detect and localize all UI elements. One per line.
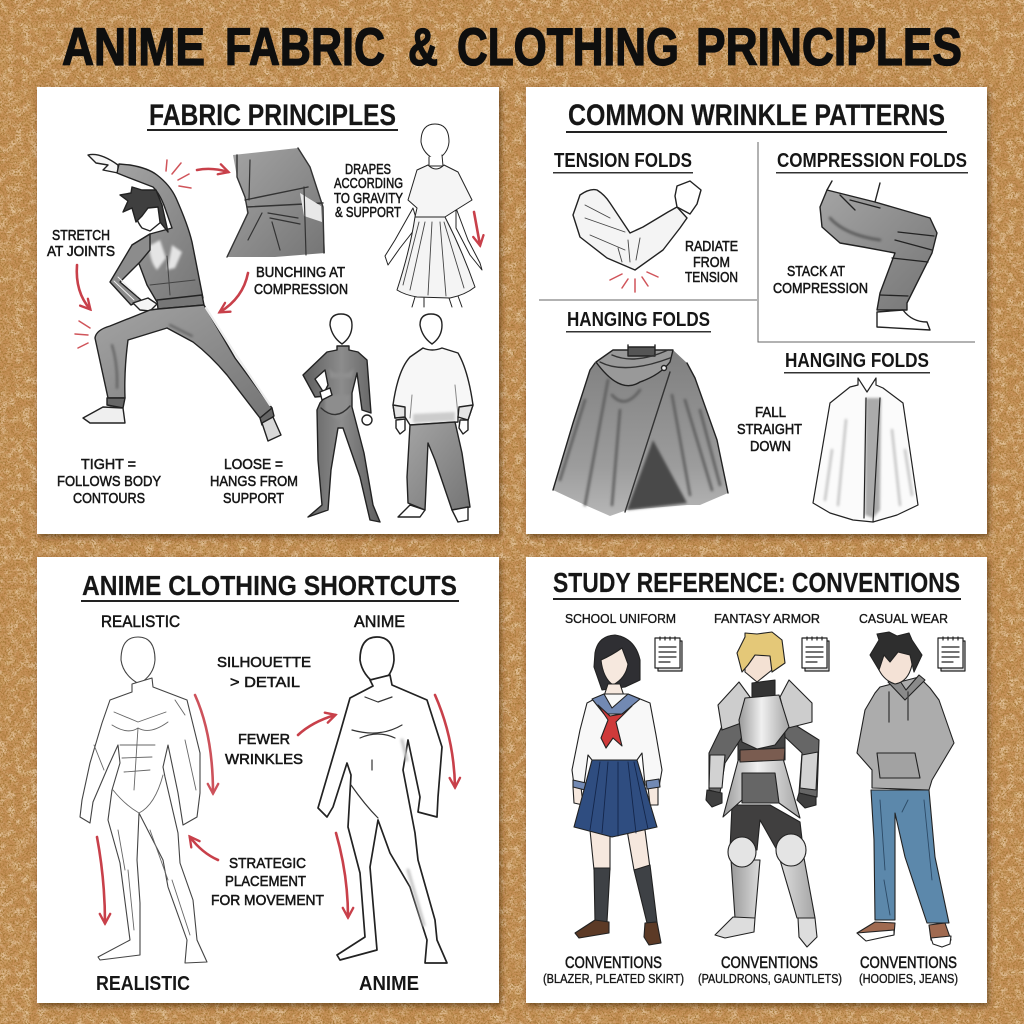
heading: fabric principles: FABRIC PRINCIPLES	[149, 99, 396, 132]
label: drapes: & SUPPORT	[335, 204, 401, 221]
label: drapes: DRAPES	[345, 161, 391, 178]
stress marks	[610, 272, 658, 292]
subheading: hanging folds left: HANGING FOLDS	[567, 309, 710, 331]
heading: common wrinkle patterns: COMMON WRINKLE PATTERNS	[568, 99, 945, 132]
label: silhouette: SILHOUETTE	[217, 654, 311, 671]
title: PRINCIPLES	[696, 18, 962, 77]
arrows: anime	[298, 695, 455, 917]
caption: casual conventions	[859, 953, 958, 986]
arrows: realistic	[97, 695, 218, 923]
label: drapes: ACCORDING	[334, 175, 403, 192]
label: radiate: FROM	[693, 254, 730, 271]
label: fall straight down: FALL	[755, 404, 786, 421]
label: radiate: RADIATE	[685, 238, 738, 255]
label: loose	[210, 456, 298, 507]
arrow: bunching	[220, 273, 248, 312]
label: radiate: TENSION	[685, 269, 738, 286]
subheading: hanging folds right: HANGING FOLDS	[785, 350, 929, 372]
compression trousers	[820, 181, 937, 330]
caption: school uniform conventions: CONVENTIONS	[565, 953, 662, 972]
panel: fabric principles	[37, 87, 499, 534]
icon: notepad 1	[655, 637, 682, 671]
figure: tight bodysuit	[303, 314, 380, 522]
label: stack at compression: STACK AT	[787, 263, 845, 280]
figure: fantasy armor	[706, 632, 819, 947]
caption: school uniform conventions: (BLAZER, PLEATED SKIRT)	[543, 971, 684, 986]
title: CLOTHING	[457, 18, 679, 77]
label: stack at compression: COMPRESSION	[773, 280, 868, 297]
panel: study reference conventions	[526, 557, 987, 1003]
figure: simplified anime body	[318, 637, 447, 963]
label: anime bottom: ANIME	[359, 973, 419, 995]
label: fall straight down	[737, 404, 802, 455]
label: fewer wrinkles: WRINKLES	[225, 751, 303, 768]
figure: school uniform	[572, 635, 662, 945]
label: loose: SUPPORT	[223, 490, 284, 507]
arrow: gravity	[474, 212, 480, 245]
fabric bunching detail	[227, 148, 325, 257]
label: bunching: COMPRESSION	[254, 281, 348, 298]
label: casual wear: CASUAL WEAR	[859, 611, 948, 626]
label: radiate	[685, 238, 738, 286]
label: strategic placement: PLACEMENT	[225, 873, 306, 890]
label: stretch at joints	[47, 227, 115, 260]
caption: casual conventions: (HOODIES, JEANS)	[859, 971, 958, 986]
label: realistic top: REALISTIC	[101, 612, 180, 631]
label: loose: HANGS FROM	[210, 473, 298, 490]
label: bunching: BUNCHING AT	[256, 264, 345, 281]
shaded cape	[553, 345, 728, 516]
label: stretch at joints: AT JOINTS	[47, 243, 115, 260]
arm in tension	[573, 181, 701, 270]
label: fall straight down: STRAIGHT	[737, 421, 802, 438]
panel: anime clothing shortcuts	[37, 557, 499, 1003]
title: FABRIC	[225, 18, 385, 77]
icon: notepad 3	[938, 637, 965, 671]
caption: school uniform conventions	[543, 953, 684, 986]
label: school uniform: SCHOOL UNIFORM	[565, 611, 676, 626]
subheading: tension folds: TENSION FOLDS	[554, 150, 692, 172]
label: tight	[57, 456, 161, 507]
arrow: stretch	[77, 265, 90, 309]
label: strategic placement	[211, 855, 324, 909]
label: tight: CONTOURS	[73, 490, 145, 507]
caption: casual conventions: CONVENTIONS	[860, 953, 957, 972]
title	[62, 18, 962, 77]
arrow: to fabric detail	[197, 169, 228, 172]
panel: common wrinkle patterns	[526, 87, 987, 534]
icon: notepad 2	[802, 637, 829, 671]
heading: anime clothing shortcuts: ANIME CLOTHING SHORTCUTS	[82, 570, 457, 601]
figure: realistic anatomy	[80, 637, 207, 963]
figure: dress	[385, 124, 482, 307]
label: realistic bottom: REALISTIC	[96, 973, 190, 995]
label: silhouette: > DETAIL	[230, 674, 300, 691]
label: stack at compression	[773, 263, 868, 297]
label: strategic placement: STRATEGIC	[229, 855, 306, 872]
caption: armor conventions	[698, 953, 842, 986]
title: ANIME	[62, 18, 205, 77]
label: drapes	[334, 161, 403, 221]
label: tight: FOLLOWS BODY	[57, 473, 161, 490]
stress marks	[75, 160, 191, 348]
label: fewer wrinkles	[225, 731, 303, 768]
label: loose: LOOSE =	[224, 456, 283, 473]
white cape	[813, 378, 918, 522]
label: tight: TIGHT =	[81, 456, 136, 473]
label: silhouette	[217, 654, 311, 691]
label: drapes: TO GRAVITY	[334, 190, 403, 207]
figure: loose sweatshirt	[393, 314, 473, 522]
caption: armor conventions: CONVENTIONS	[721, 953, 818, 972]
subheading: compression folds: COMPRESSION FOLDS	[777, 150, 967, 172]
figure: casual hoodie and jeans	[857, 632, 954, 947]
label: fewer wrinkles: FEWER	[238, 731, 290, 748]
label: fantasy armor: FANTASY ARMOR	[714, 611, 820, 626]
label: strategic placement: FOR MOVEMENT	[211, 892, 324, 909]
title: &	[408, 18, 438, 77]
figure: side-stretch tracksuit pose	[83, 154, 281, 441]
caption: armor conventions: (PAULDRONS, GAUNTLETS)	[698, 971, 842, 986]
label: stretch at joints: STRETCH	[52, 227, 110, 244]
label: anime top: ANIME	[354, 612, 405, 631]
label: fall straight down: DOWN	[750, 438, 791, 455]
label: bunching	[254, 264, 348, 298]
